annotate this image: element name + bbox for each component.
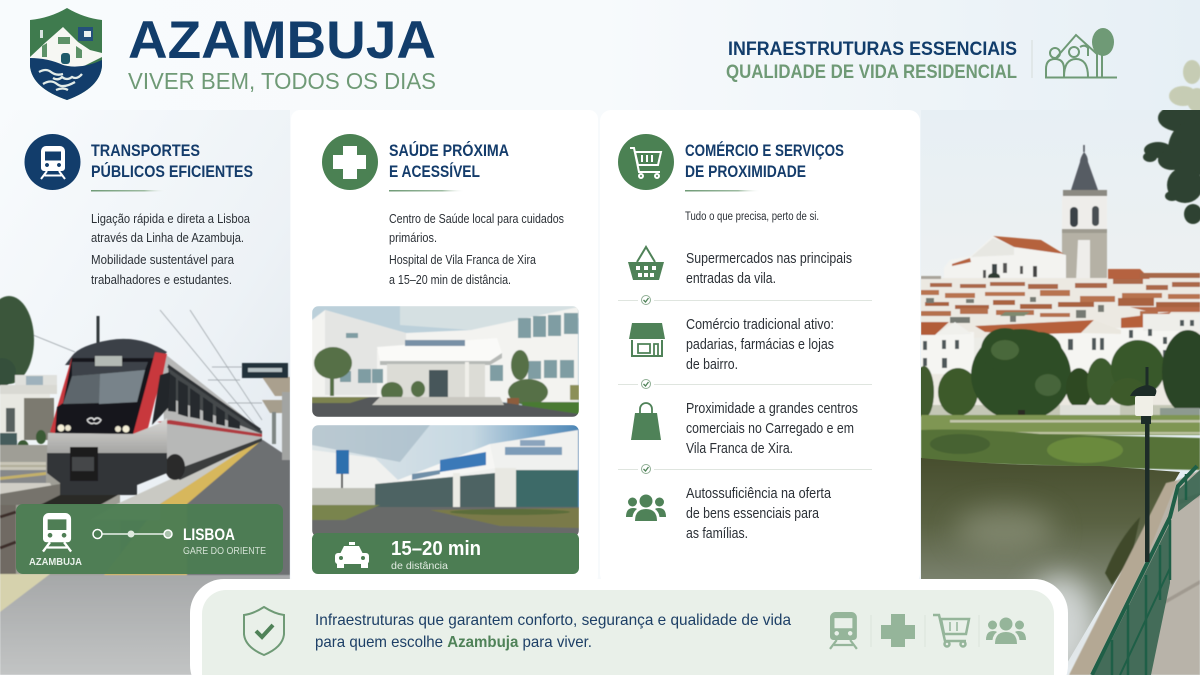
section: health xyxy=(322,134,564,287)
photo: hospital of Vila Franca de Xira xyxy=(312,425,579,537)
panel: health card xyxy=(291,110,598,585)
photo: left platform and tracks xyxy=(0,445,120,575)
header: right caption xyxy=(726,39,1017,83)
icon: cart in green circle xyxy=(618,134,674,190)
item: shopping centres: comerciais no Carregado e em xyxy=(686,421,854,437)
text: transport description: através da Linha de Azambuja. xyxy=(91,230,244,245)
heading: health: SAÚDE PRÓXIMA xyxy=(389,141,509,160)
text: footer message: Infraestruturas que garantem conforto, segurança e qualidade de vida xyxy=(315,612,791,629)
item: self-sufficiency: Autossuficiência na oferta xyxy=(686,486,832,502)
photo: town roofs and houses xyxy=(921,269,1200,408)
text: health description: Hospital de Vila Franca de Xira xyxy=(389,252,537,267)
footer band xyxy=(190,579,1068,675)
item: supermarkets: Supermercados nas principais xyxy=(686,251,852,267)
item: shopping centres xyxy=(631,401,858,457)
item: traditional commerce: de bairro. xyxy=(686,357,738,373)
photo: health centre xyxy=(312,306,579,417)
panel: train photo xyxy=(0,110,290,675)
photo: river xyxy=(921,458,1180,675)
photo: large white houses xyxy=(921,307,1200,374)
item: traditional commerce: padarias, farmácias e lojas xyxy=(686,337,834,353)
item: traditional commerce xyxy=(629,317,834,373)
item: traditional commerce: Comércio tradicional ativo: xyxy=(686,317,834,333)
banner: Azambuja to Lisboa route xyxy=(16,504,283,574)
icon row xyxy=(830,612,1026,649)
photo: catenary wires xyxy=(33,310,262,425)
photo: train front xyxy=(47,339,170,495)
text: footer message: para quem escolhe Azambuja para viver. xyxy=(315,634,592,651)
heading: health: E ACESSÍVEL xyxy=(389,162,480,181)
text: transport description: trabalhadores e estudantes. xyxy=(91,272,232,287)
item: self-sufficiency xyxy=(626,486,832,542)
photo: green railing xyxy=(1092,466,1200,675)
header: logo shield xyxy=(30,8,102,100)
item: shopping centres: Vila Franca de Xira. xyxy=(686,441,793,457)
photo: tree and station building xyxy=(0,296,57,463)
banner: 15–20 min distance: 15–20 min xyxy=(391,538,481,560)
text: transport description: Mobilidade sustentável para xyxy=(91,252,235,267)
icon: shield with check xyxy=(244,607,284,655)
banner: Azambuja to Lisboa route: GARE DO ORIENTE xyxy=(183,545,266,557)
section: public transport xyxy=(24,134,253,287)
item: self-sufficiency: de bens essenciais para xyxy=(686,506,820,522)
photo: quayside walkway xyxy=(1069,470,1200,675)
item: shopping centres: Proximidade a grandes centros xyxy=(686,401,858,417)
item: supermarkets xyxy=(628,247,852,287)
heading: commerce: COMÉRCIO E SERVIÇOS xyxy=(685,141,844,160)
item: supermarkets: entradas da vila. xyxy=(686,271,776,287)
icon: train in navy circle xyxy=(24,134,80,190)
icon: taxi xyxy=(335,542,369,568)
panel: town and river photo xyxy=(914,60,1200,675)
header: title: AZAMBUJA xyxy=(128,11,436,70)
heading: health xyxy=(389,141,509,181)
text: transport description xyxy=(91,211,251,287)
photo: river bank xyxy=(917,415,1200,470)
photo: mast on the train roof xyxy=(96,316,100,343)
header: right caption: INFRAESTRUTURAS ESSENCIAIS xyxy=(728,39,1017,60)
icon: medical cross in green circle xyxy=(322,134,378,190)
photo: right canopy and sign xyxy=(242,363,290,460)
heading: transport: PÚBLICOS EFICIENTES xyxy=(91,162,253,181)
heading: transport xyxy=(91,141,253,181)
text: health description: primários. xyxy=(389,230,437,245)
text: health description: Centro de Saúde local para cuidados xyxy=(389,211,564,226)
photo: tree top right xyxy=(1143,60,1200,224)
text: footer message xyxy=(315,612,791,651)
banner: Azambuja to Lisboa route: LISBOA xyxy=(183,525,235,544)
text: commerce intro: Tudo o que precisa, perto de si. xyxy=(685,211,819,223)
photo: street lamp xyxy=(1130,367,1156,562)
photo: trees xyxy=(921,328,1200,417)
photo: right platform xyxy=(0,440,290,675)
panel: commerce card xyxy=(600,110,920,585)
item: self-sufficiency: as famílias. xyxy=(686,526,748,542)
header divider xyxy=(1032,40,1033,78)
header: subtitle: VIVER BEM, TODOS OS DIAS xyxy=(128,68,436,94)
banner: Azambuja to Lisboa route: AZAMBUJA xyxy=(29,556,82,568)
header: right caption: QUALIDADE DE VIDA RESIDENCIAL xyxy=(726,62,1017,83)
banner: 15–20 min distance: de distância xyxy=(391,560,448,572)
heading: transport: TRANSPORTES xyxy=(91,141,200,160)
divider with check 2 xyxy=(618,380,872,388)
divider with check 1 xyxy=(618,296,872,304)
section: commerce xyxy=(618,134,872,542)
banner: 15–20 min distance xyxy=(312,533,579,574)
divider with check 3 xyxy=(618,464,872,474)
text: transport description: Ligação rápida e direta a Lisboa xyxy=(91,211,251,226)
photo: train carriages xyxy=(157,350,262,480)
text: health description xyxy=(389,211,564,287)
text: health description: a 15–20 min de distância. xyxy=(389,272,511,287)
photo: church xyxy=(944,145,1107,282)
icon: house, family and tree xyxy=(1045,28,1117,78)
heading: commerce: DE PROXIMIDADE xyxy=(685,162,806,181)
heading: commerce xyxy=(685,141,844,181)
